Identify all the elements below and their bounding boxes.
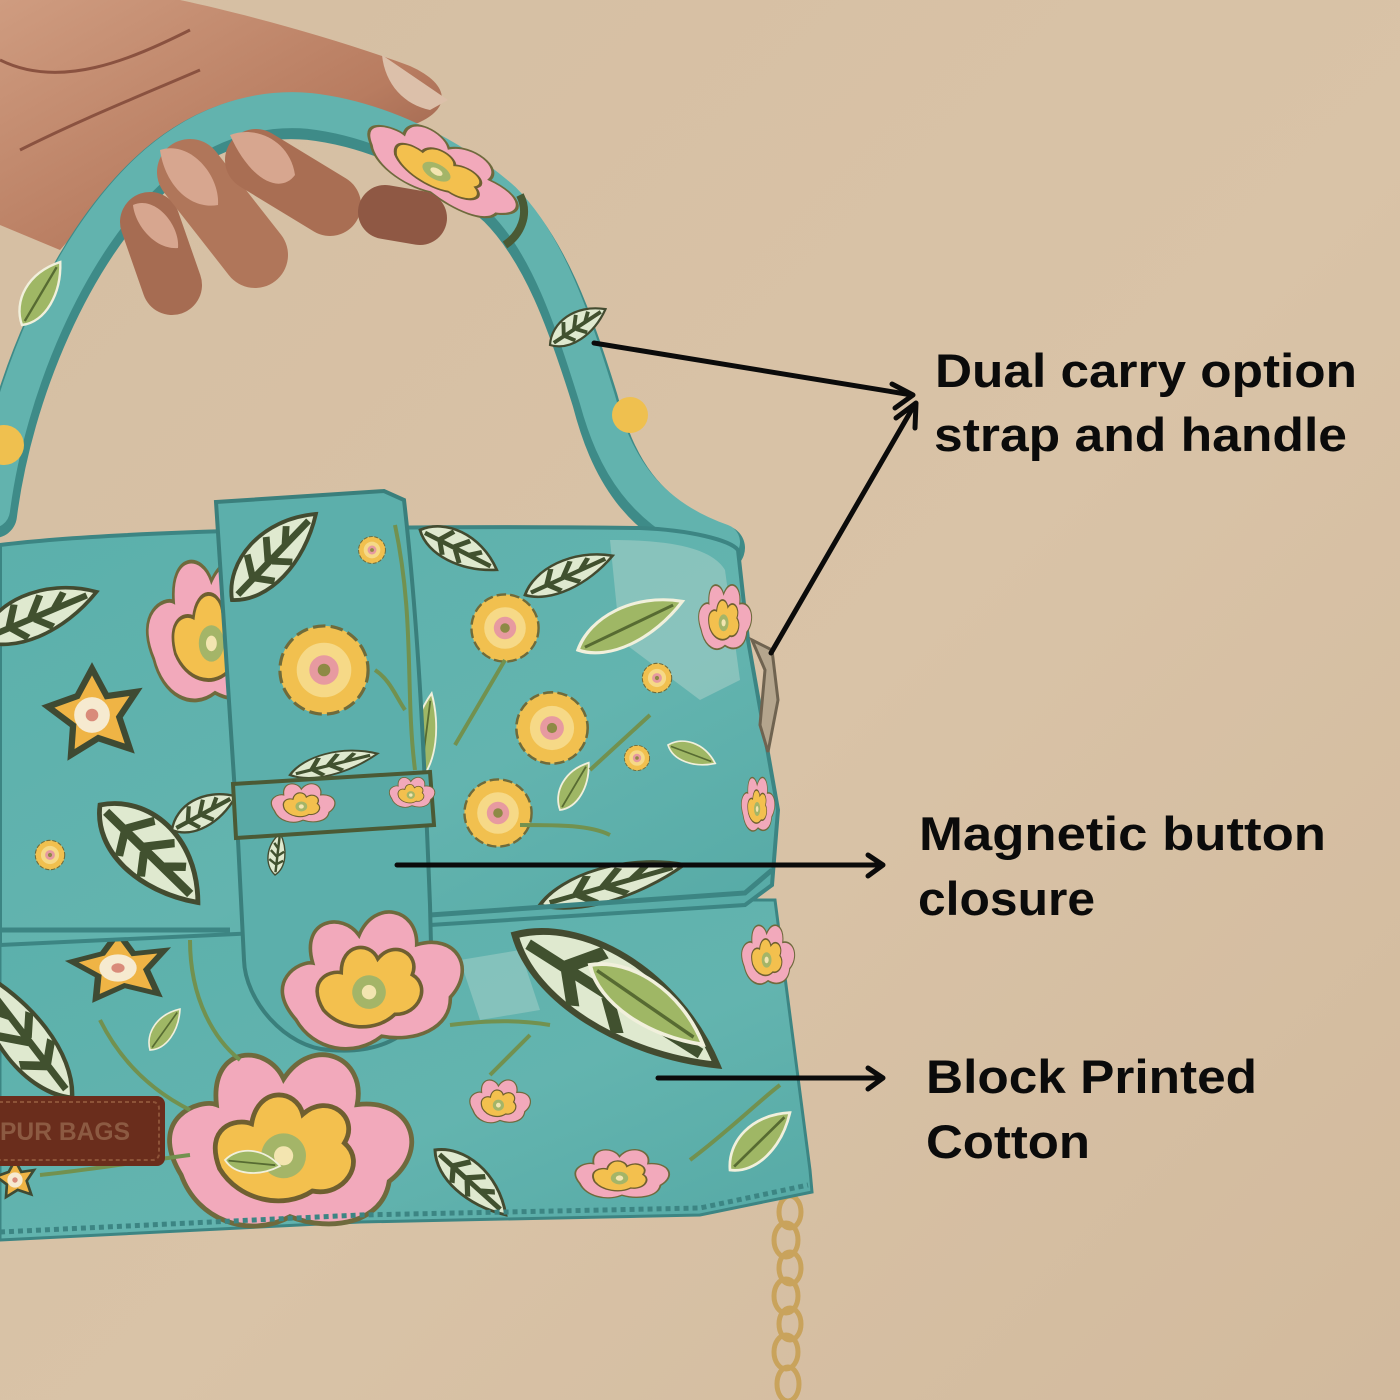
callout: block printed cotton: Block Printed: [926, 1050, 1257, 1103]
leather brand tag: PUR BAGS: [0, 1118, 130, 1146]
tab flower overhang: [272, 901, 473, 1059]
callout: block printed cotton: [926, 1050, 1257, 1168]
arrow: magnetic button: [397, 855, 883, 876]
flap: [0, 513, 778, 945]
callout: dual carry option: Dual carry option: [935, 344, 1357, 397]
top tab with rounded end: [213, 491, 432, 1051]
arrow: handle to label: [594, 343, 913, 408]
product photo: handbag held in hand: [0, 0, 812, 1400]
callout: magnetic button closure: Magnetic button: [919, 807, 1326, 860]
palm and thumb: [0, 0, 448, 250]
handle: [0, 104, 722, 548]
callout: dual carry option: strap and handle: [934, 408, 1347, 461]
horizontal strap loop: [233, 772, 435, 838]
callout: magnetic button closure: closure: [918, 872, 1095, 925]
arrow: strap hook to label: [771, 403, 916, 653]
fingers: [133, 132, 420, 285]
callout: dual carry option: [934, 344, 1357, 461]
leather brand tag: [0, 1096, 165, 1166]
gold chain strap: [774, 1196, 801, 1400]
callout: magnetic button closure: [918, 807, 1326, 925]
callout: block printed cotton: Cotton: [926, 1115, 1090, 1168]
bag body: [0, 898, 812, 1240]
arrow: cotton fabric: [658, 1068, 883, 1089]
metal hook: [752, 640, 778, 752]
